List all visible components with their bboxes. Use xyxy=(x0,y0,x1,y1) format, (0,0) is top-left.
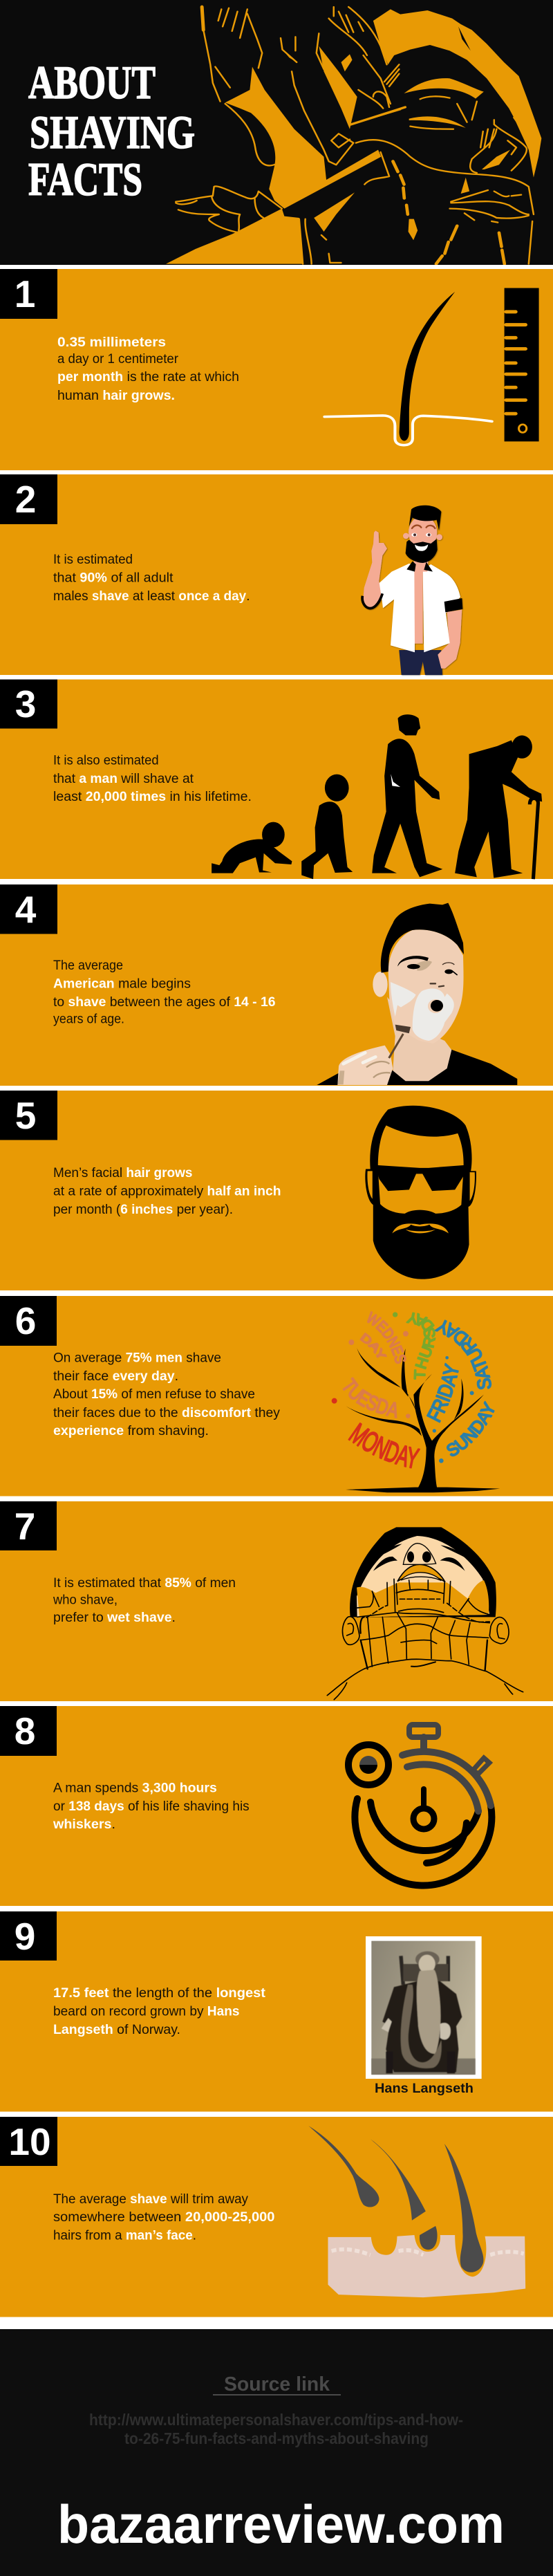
number badge 7 xyxy=(0,1501,57,1550)
text block: their face every day. xyxy=(53,1369,178,1384)
panel background xyxy=(0,1296,553,1497)
text block xyxy=(53,1166,281,1217)
weekday words: MONDAY xyxy=(348,1422,420,1469)
text block: American male begins xyxy=(53,976,191,992)
text block: at a rate of approximately half an inch xyxy=(53,1184,281,1199)
illustration: bearded man pointing up xyxy=(362,506,462,675)
text block: Langseth of Norway. xyxy=(53,2023,180,2037)
panel: fact 4 xyxy=(0,884,553,1086)
weekday words: WEDNES xyxy=(367,1311,406,1364)
panel: fact 8 xyxy=(0,1706,553,1906)
number badge 6 xyxy=(0,1296,57,1346)
panel: fact 2 xyxy=(0,474,553,675)
text block xyxy=(53,553,250,604)
number badge 1: 1 xyxy=(15,272,35,315)
panel: fact 10 xyxy=(0,2117,553,2317)
text block xyxy=(53,1576,236,1625)
weekday words: FRIDAY xyxy=(427,1362,459,1423)
illustration: hair cross-section in skin xyxy=(308,2126,525,2297)
illustration: upturned lathered face xyxy=(327,1527,523,1700)
source url: to-26-75-fun-facts-and-myths-about-shaving xyxy=(124,2429,429,2447)
text block: prefer to wet shave. xyxy=(53,1611,176,1625)
text block: human hair grows. xyxy=(57,389,175,403)
text block: somewhere between 20,000-25,000 xyxy=(53,2210,275,2225)
text block xyxy=(53,1351,280,1438)
icon: stopwatch xyxy=(348,1725,491,1886)
decorative dots xyxy=(332,1312,474,1463)
number badge 8 xyxy=(0,1706,57,1756)
illustration: ages of man silhouettes xyxy=(212,714,542,879)
illustration: tree of weekdays xyxy=(332,1311,500,1492)
title xyxy=(28,56,195,205)
weekday words: SATURDAY xyxy=(434,1319,492,1390)
text block: The average xyxy=(53,958,123,973)
tree xyxy=(346,1347,500,1492)
number badge 3: 3 xyxy=(15,683,36,725)
title: SHAVING xyxy=(30,106,195,158)
portrait: Hans Langseth xyxy=(366,1936,482,2079)
weekday words: SUNDAY xyxy=(447,1401,495,1456)
text block: years of age. xyxy=(53,1012,124,1026)
panel: fact 7 xyxy=(0,1501,553,1701)
text block: beard on record grown by Hans xyxy=(53,2004,239,2019)
weekday words: THURSDAY xyxy=(406,1313,435,1380)
panel background xyxy=(0,679,553,879)
illustration: bearded face with sunglasses xyxy=(365,1106,476,1279)
footer background xyxy=(0,2329,553,2576)
text block: per month is the rate at which xyxy=(57,370,239,384)
text block: The average shave will trim away xyxy=(53,2192,248,2207)
text block: whiskers. xyxy=(53,1817,115,1832)
number badge 2 xyxy=(0,474,57,524)
text block: experience from shaving. xyxy=(53,1424,209,1438)
silhouette: old man with cane xyxy=(455,735,542,879)
weekday words: TUESDAY xyxy=(343,1377,397,1418)
text block: A man spends 3,300 hours xyxy=(53,1781,217,1795)
number badge 9: 9 xyxy=(15,1915,35,1958)
text block xyxy=(53,1781,250,1832)
number badge 9 xyxy=(0,1911,57,1961)
text block: 17.5 feet the length of the longest xyxy=(53,1986,266,2001)
text block: that 90% of all adult xyxy=(53,571,174,585)
number badge 4: 4 xyxy=(15,888,37,931)
panel background xyxy=(0,1091,553,1290)
number badge 5: 5 xyxy=(15,1094,36,1137)
text block xyxy=(53,2192,275,2243)
text block: per month (6 inches per year). xyxy=(53,1203,233,1217)
number badge 5 xyxy=(0,1091,57,1140)
silhouette: toddler xyxy=(301,775,353,879)
panel: fact 6 xyxy=(0,1296,553,1497)
weekday words xyxy=(343,1311,495,1469)
text block: 0.35 millimeters xyxy=(57,335,166,350)
panel background xyxy=(0,2117,553,2317)
panel background xyxy=(0,269,553,470)
source heading: Source link xyxy=(224,2373,330,2396)
silhouette: adult xyxy=(372,714,442,877)
text block: who shave, xyxy=(53,1593,118,1607)
illustration: man being shaved xyxy=(166,7,541,264)
text block: or 138 days of his life shaving his xyxy=(53,1799,250,1814)
white divider xyxy=(0,265,553,269)
number badge 2: 2 xyxy=(15,478,36,521)
weekday words: DAY xyxy=(359,1332,387,1358)
icon: ruler xyxy=(505,288,539,441)
illustration: man shaving xyxy=(317,903,517,1085)
number badge 6: 6 xyxy=(15,1299,36,1342)
panel background xyxy=(0,474,553,675)
number badge 7: 7 xyxy=(15,1505,35,1548)
panel: fact 9 xyxy=(0,1911,553,2112)
number badge 4 xyxy=(0,884,57,934)
caption: Hans Langseth xyxy=(375,2082,474,2096)
text block: It is also estimated xyxy=(53,754,159,768)
panel: header xyxy=(0,0,553,265)
panel: fact 3 xyxy=(0,679,553,879)
text block: to shave between the ages of 14 - 16 xyxy=(53,995,275,1010)
text block xyxy=(57,335,239,403)
header background xyxy=(0,0,553,265)
text block: On average 75% men shave xyxy=(53,1351,221,1365)
text block: Men’s facial hair grows xyxy=(53,1166,192,1180)
panel background xyxy=(0,1501,553,1701)
text block: males shave at least once a day. xyxy=(53,589,250,604)
text block xyxy=(53,1986,266,2037)
number badge 1 xyxy=(0,269,57,319)
panel: footer xyxy=(0,2329,553,2576)
panel background xyxy=(0,1706,553,1906)
silhouette: baby xyxy=(212,822,292,873)
source url: http://www.ultimatepersonalshaver.com/tips-and-how- xyxy=(89,2411,463,2429)
text block xyxy=(53,958,275,1026)
panel: fact 5 xyxy=(0,1091,553,1290)
number badge 3 xyxy=(0,679,57,729)
panel background xyxy=(0,1911,553,2112)
text block: About 15% of men refuse to shave xyxy=(53,1387,255,1402)
text block: a day or 1 centimeter xyxy=(57,352,179,367)
number badge 10 xyxy=(0,2117,57,2166)
panel: fact 1 xyxy=(0,269,553,470)
title: FACTS xyxy=(28,153,142,205)
panel background xyxy=(0,884,553,1086)
number badge 8: 8 xyxy=(15,1709,35,1752)
text block: It is estimated xyxy=(53,553,133,567)
text block xyxy=(53,754,252,804)
text block: that a man will shave at xyxy=(53,772,194,786)
site name: bazaarreview.com xyxy=(57,2494,505,2555)
text block: their faces due to the discomfort they xyxy=(53,1406,280,1420)
icon: hair follicle xyxy=(324,292,492,445)
number badge 10: 10 xyxy=(8,2120,51,2163)
title: ABOUT xyxy=(28,56,156,109)
text block: It is estimated that 85% of men xyxy=(53,1576,236,1591)
text block: least 20,000 times in his lifetime. xyxy=(53,790,252,804)
text block: hairs from a man’s face. xyxy=(53,2228,196,2243)
source url xyxy=(89,2411,463,2447)
